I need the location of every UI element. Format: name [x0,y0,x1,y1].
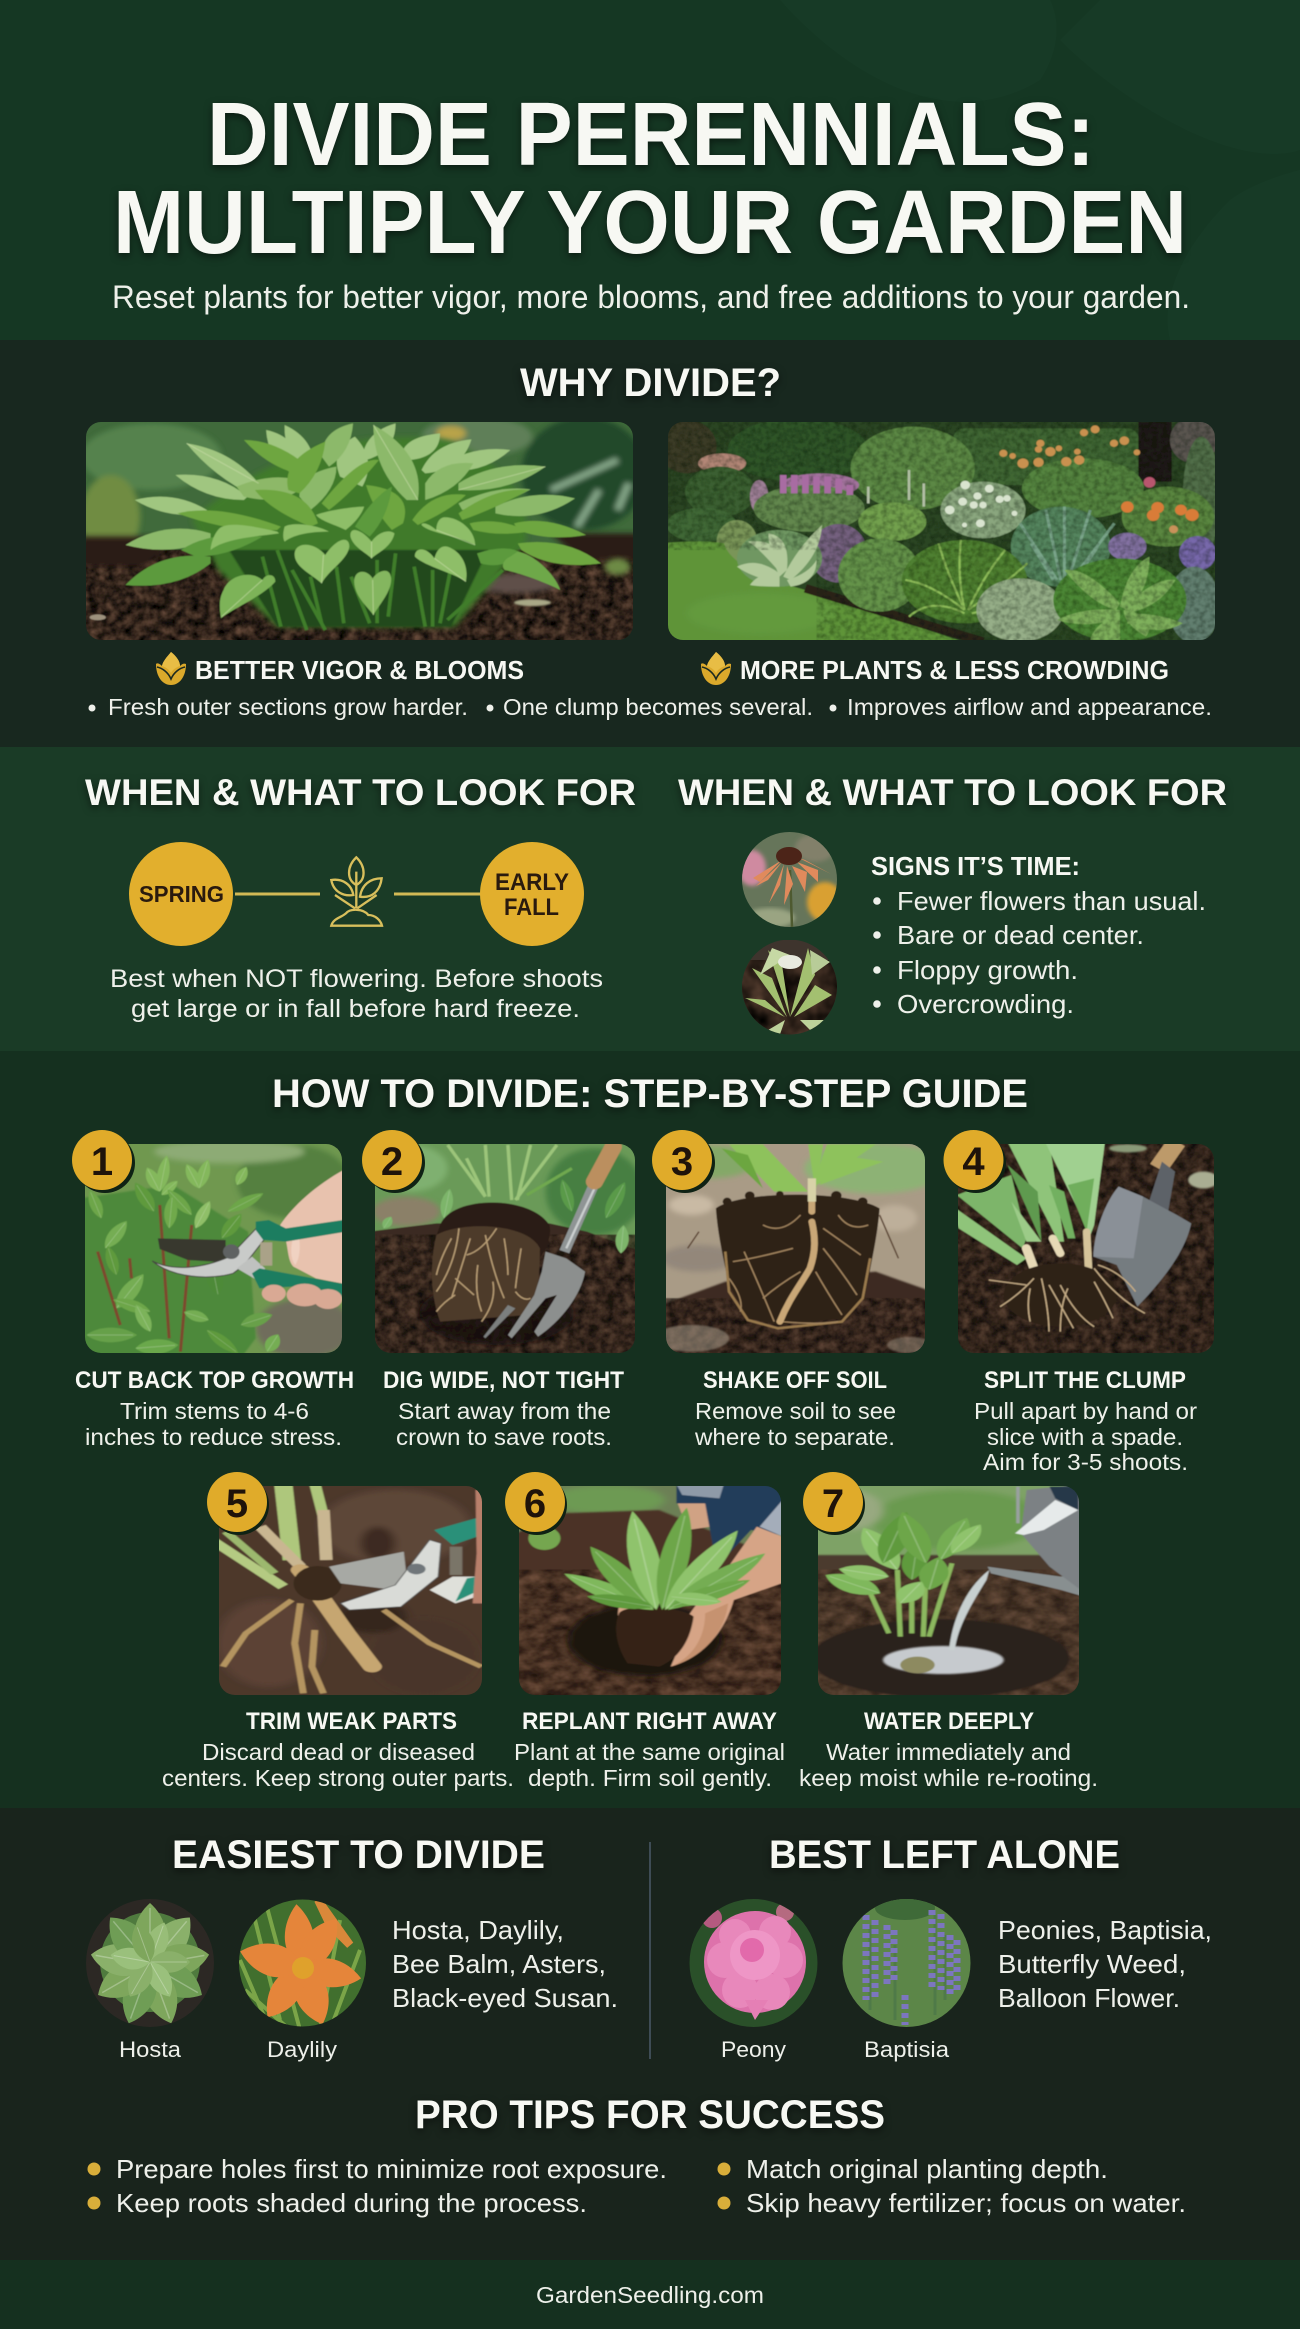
step description [85,1398,342,1450]
badge: 6: 6 [524,1482,546,1526]
step title: DIG WIDE, NOT TIGHT [383,1367,624,1394]
timing note [110,965,603,1023]
easy plant list: Bee Balm, Asters, [392,1949,606,1979]
caption: better vigor and blooms: BETTER VIGOR & BLOOMS [195,655,524,685]
icon: gold tulip [156,652,186,685]
photo: spade splitting clump [958,1144,1214,1353]
photo: pruning stems [85,1144,342,1353]
badge: 7 [803,1472,865,1535]
photo: coneflower [742,832,837,927]
photo: trimming roots [219,1486,482,1695]
pro tips right column: Match original planting depth. [746,2154,1108,2184]
step description: crown to save roots. [396,1424,612,1450]
easy plant list: Hosta, Daylily, [392,1915,564,1945]
step description [974,1398,1197,1475]
step title: CUT BACK TOP GROWTH [75,1367,354,1394]
step description: Start away from the [398,1398,611,1424]
pro tips right column [718,2154,1186,2218]
badge: early fall [480,842,584,946]
badge: 5 [207,1472,269,1535]
panel: plant lists and pro tips [0,1808,1300,2260]
step description [162,1739,514,1791]
signs list: Bare or dead center. [897,920,1144,950]
photo: replanting in hole [519,1486,781,1695]
badge: 1 [72,1130,135,1193]
step description [396,1398,612,1450]
badge: 6 [505,1472,567,1535]
timing note: get large or in fall before hard freeze. [131,995,580,1023]
title [113,85,1187,273]
step description: depth. Firm soil gently. [528,1765,772,1791]
left-alone plant list: Balloon Flower. [998,1983,1180,2013]
photo: healthy hosta clump [81,417,647,645]
pro tips right column: Skip heavy fertilizer; focus on water. [746,2188,1186,2218]
panel: header [0,0,1300,340]
label: hosta: Hosta [119,2037,182,2062]
caption: more plants and less crowding: MORE PLANTS & LESS CROWDING [740,655,1169,685]
step description: keep moist while re-rooting. [799,1765,1098,1791]
step description: Trim stems to 4-6 [120,1398,309,1424]
signs list [871,851,1206,1019]
step description [514,1739,785,1791]
badge: 4: 4 [962,1140,985,1184]
subtitle: Reset plants for better vigor, more blooms, and free additions to your garden. [112,279,1190,315]
step description: Aim for 3-5 shoots. [983,1449,1188,1475]
benefit bullets: Improves airflow and appearance. [847,694,1212,720]
photo: watering transplant [818,1486,1079,1695]
panel: why divide [86,362,1215,720]
connector right [394,892,481,896]
step 3: shake off soil [652,1130,947,1450]
photo: daylily [236,1899,366,2030]
heading: when left: WHEN & WHAT TO LOOK FOR [85,772,636,813]
benefit bullets [88,694,1212,720]
pro tips left column: Prepare holes first to minimize root exposure. [116,2154,667,2184]
icon: gold tulip [701,652,731,685]
step title: SPLIT THE CLUMP [984,1367,1186,1394]
step description: Discard dead or diseased [202,1739,475,1765]
signs list: Floppy growth. [897,955,1078,985]
step description: centers. Keep strong outer parts. [162,1765,514,1791]
step title: WATER DEEPLY [864,1708,1034,1735]
pro tips left column: Keep roots shaded during the process. [116,2188,587,2218]
step description [694,1398,896,1450]
step 2: dig wide, not tight [362,1130,643,1450]
photo: lifted root ball [666,1144,925,1353]
step description: slice with a spade. [987,1424,1183,1450]
heading: why divide: WHY DIVIDE? [520,361,781,405]
photo: full perennial garden border [657,417,1222,645]
background leaf pattern [780,0,1300,340]
easy plant list: Black-eyed Susan. [392,1983,618,2013]
panel: how to divide [72,1079,1214,1791]
left-alone plant list: Peonies, Baptisia, [998,1915,1212,1945]
footer [0,2260,1300,2329]
connector left [235,892,320,896]
pro tips left column [88,2154,667,2218]
photo: baptisia [842,1896,971,2027]
timeline: spring to early fall [129,842,584,946]
title: MULTIPLY YOUR GARDEN [113,173,1187,273]
panel: when and what to look for [0,747,1300,1051]
step description: inches to reduce stress. [85,1424,342,1450]
badge: spring [129,842,233,946]
label: peony: Peony [721,2037,786,2062]
photo: peony [689,1899,818,2027]
step description [799,1739,1098,1791]
badge: early fall: FALL [504,894,559,921]
signs list: SIGNS IT’S TIME: [871,851,1080,881]
timing note: Best when NOT flowering. Before shoots [110,965,603,993]
signs list: Overcrowding. [897,989,1074,1019]
benefit bullets: Fresh outer sections grow harder. [108,694,468,720]
heading: pro tips: PRO TIPS FOR SUCCESS [415,2093,885,2137]
step title: REPLANT RIGHT AWAY [522,1708,777,1735]
icon: seedling [331,857,382,926]
step 7: water deeply [799,1472,1098,1791]
title: DIVIDE PERENNIALS: [207,85,1095,185]
signs list: Fewer flowers than usual. [897,886,1206,916]
step description: Remove soil to see [695,1398,896,1424]
badge: 4 [944,1130,1006,1193]
badge: 3 [652,1130,715,1193]
step description: Pull apart by hand or [974,1398,1197,1424]
label: baptisia: Baptisia [864,2037,950,2062]
step description: Plant at the same original [514,1739,785,1765]
left-alone plant list [998,1915,1212,2013]
badge: 5: 5 [226,1482,248,1526]
badge: 3: 3 [671,1140,693,1184]
benefit bullets: One clump becomes several. [503,694,813,720]
badge: spring: SPRING [139,881,224,907]
badge: 7: 7 [822,1482,844,1526]
label: daylily: Daylily [267,2037,337,2062]
photo: clump with bare center [742,940,837,1040]
photo: digging fork at root ball [375,1144,635,1353]
step 4: split the clump [944,1130,1222,1475]
step title: SHAKE OFF SOIL [703,1367,887,1394]
badge: 2 [362,1130,425,1193]
footer: GardenSeedling.com [536,2282,764,2308]
badge: early fall: EARLY [495,869,569,896]
heading: when right: WHEN & WHAT TO LOOK FOR [678,772,1227,813]
easy plant list [392,1915,618,2013]
heading: best left alone: BEST LEFT ALONE [769,1833,1120,1877]
step 1: cut back top growth [72,1130,354,1450]
step 6: replant right away [505,1472,791,1791]
photo: hosta [86,1899,214,2029]
heading: easiest to divide: EASIEST TO DIVIDE [172,1833,545,1877]
step 5: trim weak parts [162,1472,514,1791]
step title: TRIM WEAK PARTS [246,1708,457,1735]
badge: 2: 2 [381,1140,403,1184]
badge: 1: 1 [91,1140,113,1184]
step description: Water immediately and [826,1739,1071,1765]
step description: where to separate. [694,1424,895,1450]
heading: how to divide: HOW TO DIVIDE: STEP-BY-STEP GUIDE [272,1072,1028,1116]
left-alone plant list: Butterfly Weed, [998,1949,1186,1979]
